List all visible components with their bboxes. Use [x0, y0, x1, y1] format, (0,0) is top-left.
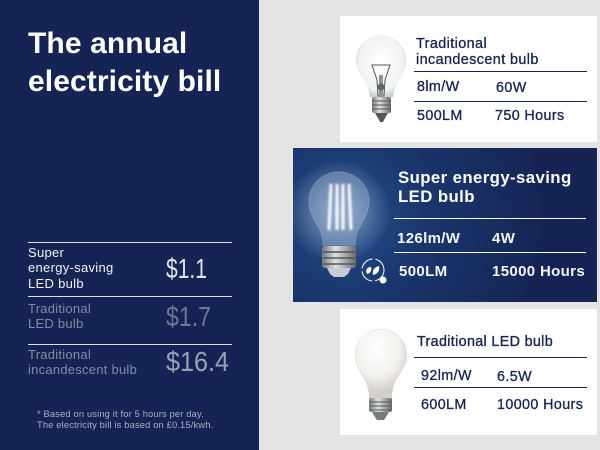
row: traditional incandescent bulb — [28, 346, 229, 377]
row: super energy-saving LED bulb — [28, 245, 207, 291]
specs: 750 Hours — [495, 108, 565, 124]
icon: eco leaf cycle — [362, 259, 386, 284]
specs: 500LM — [399, 263, 447, 280]
specs: 4W — [492, 230, 516, 247]
specs: 10000 Hours — [497, 397, 583, 413]
specs: 6.5W — [497, 369, 532, 385]
footnote: * Based on using it for 5 hours per day. — [37, 409, 204, 419]
panel: annual bill — [0, 0, 259, 450]
heading: Traditional LED bulb — [417, 334, 553, 350]
row: traditional incandescent bulb: $16.4 — [166, 346, 229, 377]
specs: 15000 Hours — [492, 263, 585, 280]
row: traditional LED bulb: LED bulb — [28, 316, 83, 331]
row: super energy-saving LED bulb: $1.1 — [166, 253, 207, 284]
heading: Super energy-saving — [398, 168, 572, 187]
footnote: The electricity bill is based on £0.15/kwh. — [37, 420, 213, 430]
row: super energy-saving LED bulb: Super — [28, 245, 65, 260]
row: traditional LED bulb: $1.7 — [166, 301, 211, 332]
panel: traditional LED bulb — [340, 309, 597, 435]
specs: 92lm/W — [421, 368, 472, 384]
row: super energy-saving LED bulb: energy-saving — [28, 260, 114, 275]
icon: incandescent bulb — [356, 35, 406, 122]
row: traditional LED bulb: Traditional — [28, 301, 91, 316]
panel: traditional incandescent bulb — [340, 16, 597, 142]
heading: Traditional — [416, 36, 487, 52]
specs: 8lm/W — [417, 79, 460, 95]
title: electricity bill — [28, 65, 221, 98]
specs: 500LM — [417, 108, 463, 124]
heading: LED bulb — [398, 187, 475, 206]
panel: super energy-saving LED bulb — [287, 148, 597, 302]
row: traditional LED bulb — [28, 301, 211, 332]
icon: filament bulb — [287, 160, 391, 277]
title: The annual — [28, 27, 187, 60]
icon: frosted bulb — [355, 329, 407, 420]
specs: 600LM — [421, 397, 467, 413]
row: super energy-saving LED bulb: LED bulb — [28, 276, 84, 291]
row: traditional incandescent bulb: incandescent bulb — [28, 362, 137, 377]
row: traditional incandescent bulb: Traditional — [28, 347, 91, 362]
heading: incandescent bulb — [416, 52, 539, 68]
specs: 60W — [496, 80, 527, 96]
specs: 126lm/W — [397, 230, 461, 247]
